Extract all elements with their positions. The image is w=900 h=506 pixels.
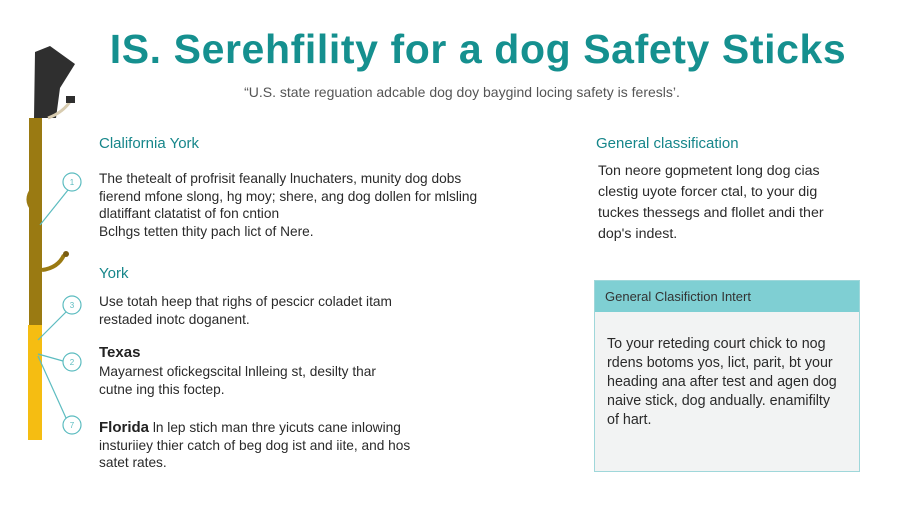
section: York [99,265,392,327]
section: Texas: Mayarnest ofickegscital lnlleing st, desilty thar [99,364,376,379]
box text: naive stick, dog andually. enamifilty [607,393,830,409]
box text: heading ana after test and agen dog [607,374,837,390]
illustration: safety stick: 1 [70,178,75,187]
stick handle [34,46,75,118]
section: California York: The thetealt of profrisit feanally lnuchaters, munity dog dobs [99,171,461,186]
illustration: safety stick: 3 [70,301,75,310]
box text [607,336,837,428]
box text: of hart. [607,412,652,428]
illustration: safety stick [26,46,82,440]
section: California York: dlatiffant clatatist of fon cntion [99,206,279,221]
box header: General Clasifiction Intert [605,289,751,304]
section: General classification: clestig uyote forcer ctal, to your dig [598,184,817,200]
section: Florida: Florida ln lep stich man thre yicuts cane inlowing [99,419,401,436]
section: Florida: satet rates. [99,455,167,470]
section: York: York [99,265,128,282]
section: York: restaded inotc doganent. [99,312,250,326]
section: General classification: tuckes thessegs and flollet andi ther [598,205,824,221]
section: Florida [99,419,410,470]
section: Texas [99,344,376,397]
box text: rdens botoms yos, lict, parit, bt your [607,355,833,371]
subtitle: “U.S. state reguation adcable dog doy baygind locing safety is feresls’. [244,84,680,100]
panel: info box [594,280,860,472]
section: General classification: General classification [596,135,739,152]
section: Florida: insturiiey thier catch of beg dog ist and iite, and hos [99,438,410,452]
section: General classification: dop's indest. [598,226,677,242]
section: California York: fierend mfone slong, hg moy; shere, ang dog dollen for mlsling [99,188,477,204]
section: Texas: cutne ing this foctep. [99,382,225,396]
title: IS. Serehfility for a dog Safety Sticks [110,26,846,72]
section: California York: Clalifornia York [99,135,199,152]
section: Texas: Texas [99,344,140,361]
section: General classification: Ton neore gopmetent long dog cias [598,163,820,179]
section: York: Use totah heep that righs of pescicr coladet itam [99,294,392,309]
callout markers [38,173,81,434]
illustration: safety stick: 2 [70,358,75,367]
box header [595,281,859,312]
stick body [28,118,69,440]
section: California York [99,135,477,239]
section: California York: Bclhgs tetten thity pach lict of Nere. [99,224,314,238]
section: General classification [596,135,824,242]
box text: To your reteding court chick to nog [607,336,826,352]
illustration: safety stick: 7 [70,421,75,430]
